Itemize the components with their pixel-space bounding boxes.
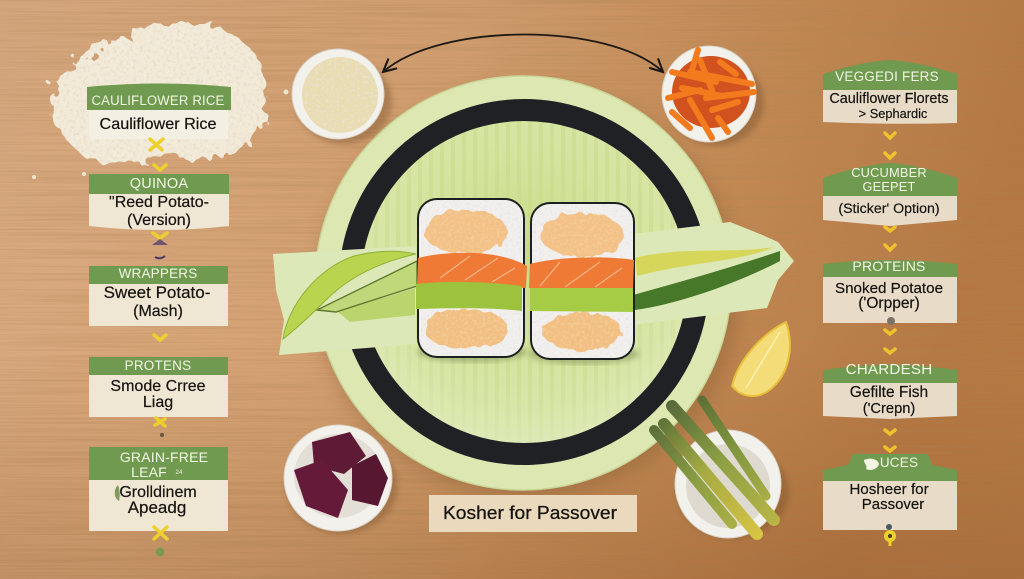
heading	[823, 365, 957, 383]
right card 5: sauces: Hosheer for	[849, 481, 929, 498]
left card 3: wrappers: Sweet Potato-	[104, 283, 210, 302]
right card 2: cucumber: GEEPET	[862, 179, 916, 194]
left card 4: proteins: Liag	[143, 394, 173, 411]
left card 1: cauliflower rice: Cauliflower Rice	[100, 116, 217, 133]
left card 5: grain-free leaf	[89, 447, 228, 531]
caption box: Kosher for Passover	[443, 503, 617, 523]
left card 4: proteins	[89, 357, 228, 417]
right card 1: veggie fillers: > Sephardic	[859, 106, 928, 121]
curved double arrow	[383, 34, 663, 72]
right card 5: sauces: Passover	[862, 496, 924, 513]
lemon wedge	[732, 322, 790, 396]
right connectors	[884, 133, 896, 546]
heading	[823, 454, 957, 481]
left card 5: grain-free leaf: Apeadg	[128, 498, 186, 517]
left card 1: cauliflower rice: CAULIFLOWER RICE	[92, 93, 224, 108]
left card 2: quinoa: (Version)	[127, 212, 191, 229]
right card 2: cucumber: (Sticker' Option)	[838, 201, 940, 217]
right card 4: chardesh: ('Crepn)	[863, 401, 915, 417]
left card 2: quinoa: "Reed Potato-	[109, 194, 209, 211]
right card 5: sauces	[823, 454, 957, 530]
left card 5: grain-free leaf: LEAF	[131, 464, 167, 480]
right card 5: sauces: UCES	[880, 455, 918, 470]
right card 1: veggie fillers	[823, 60, 957, 124]
heading	[87, 84, 231, 110]
left card 3: wrappers	[89, 266, 228, 326]
heading	[89, 447, 228, 480]
icon: white blob	[864, 459, 879, 470]
left sushi roll	[416, 198, 527, 362]
right card 3: proteins	[823, 258, 957, 323]
right card 2: cucumber	[823, 163, 957, 226]
left card 5: grain-free leaf: 24	[175, 470, 183, 476]
heading	[89, 174, 229, 194]
bowl: beets	[284, 425, 398, 534]
right card 4: chardesh: Gefilte Fish	[850, 384, 928, 401]
right card 3: proteins: Snoked Potatoe	[835, 280, 943, 297]
caption box	[429, 495, 637, 532]
heading	[823, 260, 957, 277]
bowl: quinoa	[292, 49, 392, 144]
icon: leaf mark	[115, 485, 120, 501]
bowl: carrots	[662, 46, 764, 146]
left card 4: proteins: Smode Crree	[110, 378, 206, 395]
heading	[89, 357, 228, 375]
heading	[823, 60, 957, 90]
heading	[823, 163, 957, 196]
left card 5: grain-free leaf: Grolldinem	[119, 484, 197, 501]
left cucumber slices	[283, 251, 417, 339]
right card 4: chardesh: CHARDESH	[846, 361, 932, 378]
circular cucumber wrap on nori	[315, 76, 740, 497]
right sushi roll	[529, 202, 639, 364]
right card 1: veggie fillers: Cauliflower Florets	[829, 91, 949, 107]
bowl: asparagus	[654, 400, 789, 538]
right card 2: cucumber: CUCUMBER	[851, 165, 927, 180]
left card 4: proteins: PROTENS	[125, 358, 191, 373]
right card 1: veggie fillers: VEGGEDI FERS	[835, 69, 939, 84]
left card 3: wrappers: WRAPPERS	[119, 266, 197, 281]
heading	[89, 266, 228, 284]
right card 3: proteins: ('Orpper)	[858, 295, 920, 312]
rice pile	[32, 22, 288, 179]
left card 3: wrappers: (Mash)	[133, 303, 183, 320]
left card 1: cauliflower rice	[87, 84, 231, 139]
left card 2: quinoa	[89, 174, 229, 230]
right card 3: proteins: PROTEINS	[852, 258, 926, 274]
left card 5: grain-free leaf: GRAIN-FREE	[120, 449, 208, 465]
right card 4: chardesh	[823, 361, 957, 419]
wrapper strip with cucumber slices	[273, 222, 794, 355]
left connectors	[150, 139, 168, 556]
left card 2: quinoa: QUINOA	[130, 176, 188, 192]
right cucumber slices	[633, 247, 780, 310]
